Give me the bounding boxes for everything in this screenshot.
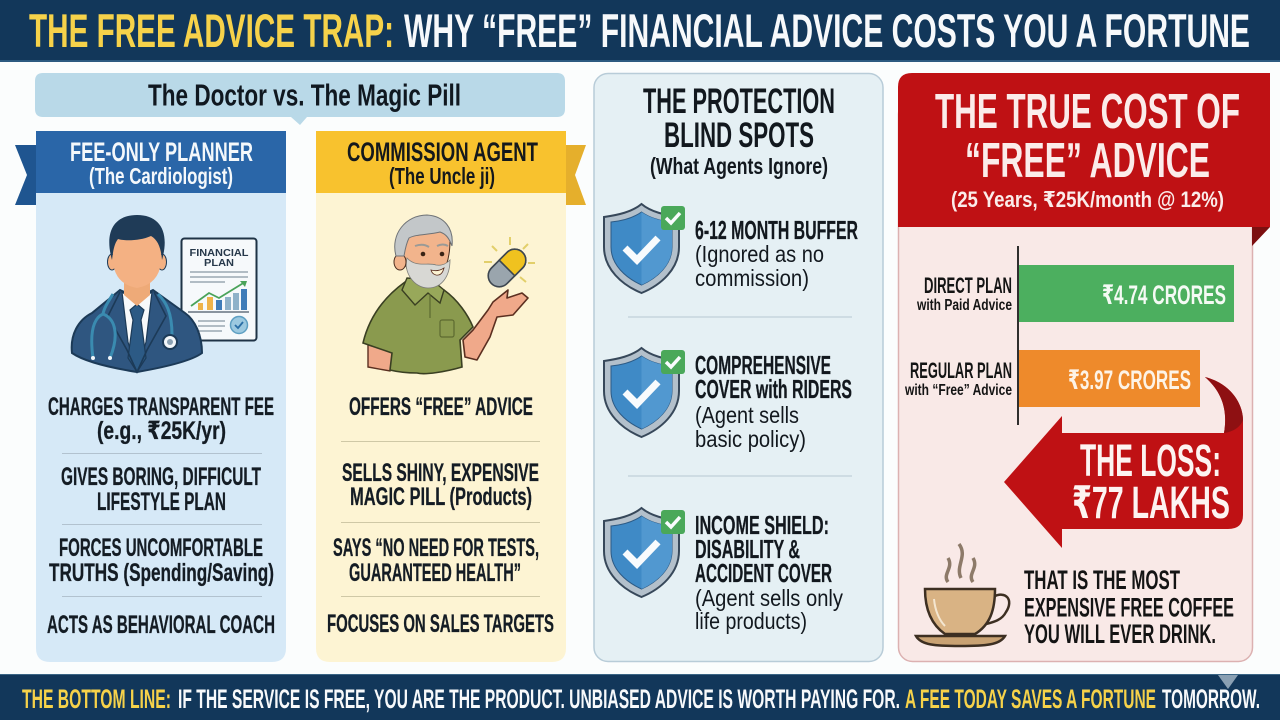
list: planner traits <box>47 393 275 639</box>
bar: regular plan <box>1019 350 1200 407</box>
label: direct plan: DIRECT PLAN <box>924 273 1012 298</box>
list: planner traits: GIVES BORING, DIFFICULT <box>61 463 261 491</box>
panel: commission agent <box>316 131 586 662</box>
list: agent traits: SELLS SHINY, EXPENSIVE <box>342 459 539 487</box>
bar: regular plan: ₹3.97 CRORES <box>1068 365 1191 395</box>
blind spot 2 text: basic policy) <box>695 426 806 452</box>
label: direct plan <box>916 273 1012 314</box>
icon: shield 1 <box>604 204 685 293</box>
list: agent traits: GUARANTEED HEALTH” <box>349 559 521 587</box>
header: fee-only planner: FEE-ONLY PLANNER <box>70 137 253 167</box>
blind spot 2 text <box>695 350 852 452</box>
blind spot 3 text: ACCIDENT COVER <box>695 558 832 588</box>
icon: financial plan document: PLAN <box>204 258 234 269</box>
heading: protection blind spots <box>643 82 835 179</box>
footer: the bottom line: THE BOTTOM LINE: <box>22 684 171 714</box>
blind spot 3 text: life products) <box>695 608 807 634</box>
icon: financial plan document <box>182 238 256 340</box>
icon: shield 3 <box>604 508 685 597</box>
closing text <box>1024 565 1234 649</box>
blind spot 2 text: COVER with RIDERS <box>695 374 852 404</box>
list: planner traits: TRUTHS (Spending/Saving) <box>49 559 274 587</box>
icon: uncle with pill <box>363 215 535 374</box>
red header: (25 Years, ₹25K/month @ 12%) <box>951 187 1224 212</box>
icon: pill <box>484 245 530 291</box>
list: planner traits: (e.g., ₹25K/yr) <box>97 417 226 445</box>
blind spot 3 text: INCOME SHIELD: <box>695 510 829 540</box>
blind spot 3 text: (Agent sells only <box>695 585 843 611</box>
header: commission agent: (The Uncle ji) <box>389 163 495 189</box>
footer: the bottom line <box>0 674 1280 720</box>
closing text: THAT IS THE MOST <box>1024 565 1180 595</box>
list: planner traits: CHARGES TRANSPARENT FEE <box>48 393 274 421</box>
list: planner traits: LIFESTYLE PLAN <box>97 488 226 516</box>
arrow: the loss <box>1004 377 1243 548</box>
list: agent traits: MAGIC PILL (Products) <box>350 483 532 511</box>
blind spot 3 text <box>695 510 843 634</box>
icon: shield 2 <box>604 348 685 437</box>
label: regular plan <box>904 358 1012 399</box>
panel: fee-only planner <box>15 131 286 662</box>
list: agent traits: SAYS “NO NEED FOR TESTS, <box>333 534 539 562</box>
list: agent traits <box>327 393 554 638</box>
heading: protection blind spots: THE PROTECTION <box>643 82 835 121</box>
title banner <box>0 0 1280 62</box>
panel: the protection blind spots <box>594 74 883 662</box>
list: agent traits: OFFERS “FREE” ADVICE <box>349 393 533 421</box>
subtitle banner: The Doctor vs. The Magic Pill <box>35 73 565 125</box>
header: fee-only planner: (The Cardiologist) <box>89 163 233 189</box>
icon: doctor <box>72 215 202 372</box>
header: fee-only planner <box>36 131 286 193</box>
list: agent traits: FOCUSES ON SALES TARGETS <box>327 610 554 638</box>
blind spot 1 text: (Ignored as no <box>695 241 824 267</box>
subtitle banner: The Doctor vs. The Magic Pill: The Doctor vs. The Magic Pill <box>148 78 461 112</box>
ribbon left <box>15 145 36 205</box>
blind spot 3 text: DISABILITY & <box>695 534 800 564</box>
title text yellow: THE FREE ADVICE TRAP: <box>29 4 394 57</box>
blind spot 1 text: commission) <box>695 265 809 291</box>
bar chart: direct vs regular <box>904 246 1234 425</box>
header: commission agent: COMMISSION AGENT <box>347 137 538 167</box>
bar: direct plan <box>1019 265 1234 322</box>
list: planner traits: ACTS AS BEHAVIORAL COACH <box>47 611 275 639</box>
blind spot 2 text: (Agent sells <box>695 402 799 428</box>
label: direct plan: with Paid Advice <box>916 297 1012 314</box>
header: commission agent <box>316 131 566 193</box>
header fold <box>1252 227 1270 246</box>
icon: financial plan document: FINANCIAL <box>190 248 248 259</box>
panel: true cost of free advice <box>898 73 1270 662</box>
heading: protection blind spots: BLIND SPOTS <box>664 116 814 155</box>
blind spot 2 text: COMPREHENSIVE <box>695 350 831 380</box>
blind spot 1 text: 6-12 MONTH BUFFER <box>695 215 858 245</box>
heading: protection blind spots: (What Agents Ignore) <box>650 153 828 179</box>
list: planner traits: FORCES UNCOMFORTABLE <box>59 534 263 562</box>
blind spot 1 text <box>695 215 858 291</box>
red header <box>898 73 1270 227</box>
label: regular plan: REGULAR PLAN <box>910 358 1012 383</box>
label: regular plan: with “Free” Advice <box>904 382 1012 399</box>
ribbon right <box>566 145 586 205</box>
icon: coffee cup <box>916 544 1009 646</box>
